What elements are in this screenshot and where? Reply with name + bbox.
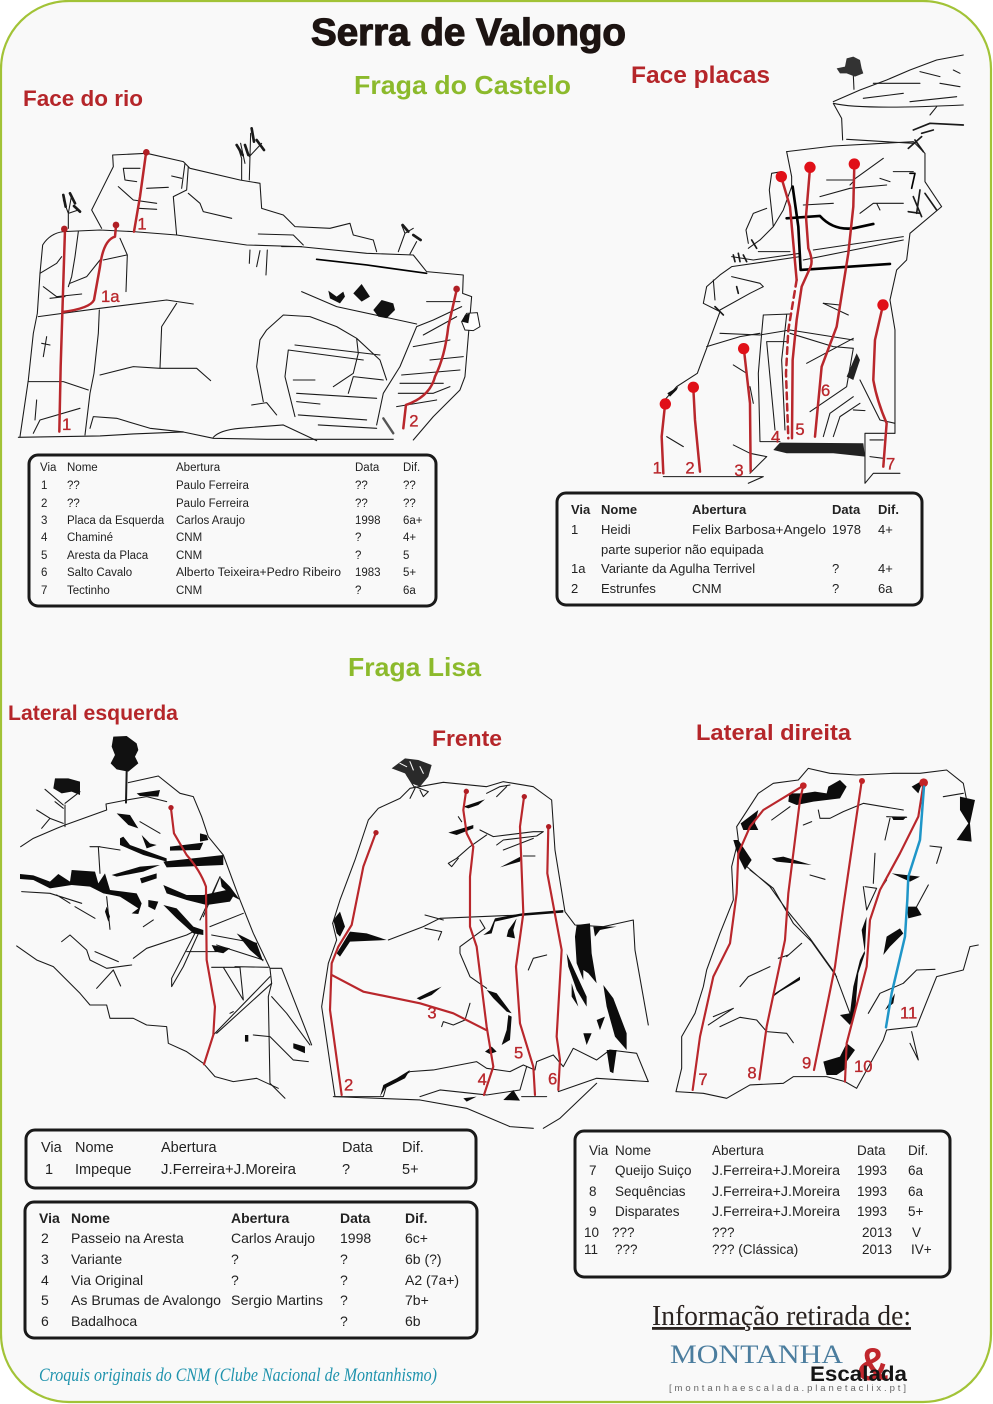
table: Lateral direita routes: IV+ <box>911 1242 932 1257</box>
table: Face do rio routes: 6a <box>878 581 893 596</box>
table: Lateral direita routes <box>575 1131 950 1277</box>
table: Face placas routes: Abertura <box>176 462 221 474</box>
table: Lateral esquerda route: J.Ferreira+J.Moreira <box>161 1162 297 1178</box>
table: Face placas routes: Tectinho <box>67 585 110 597</box>
diagram: Frente: 6 <box>548 1069 557 1088</box>
table: Lateral esquerda route: Via <box>41 1140 63 1156</box>
table: Face placas routes: Salto Cavalo <box>67 567 132 579</box>
table: Frente routes: Sergio Martins <box>231 1292 323 1308</box>
table: Frente routes: ? <box>231 1272 239 1288</box>
table: Face placas routes: ?? <box>67 498 80 510</box>
table: Face placas routes: Alberto Teixeira+Pedro Ribeiro <box>176 567 341 579</box>
table: Face do rio routes: Variante da Agulha Terrivel <box>601 561 755 576</box>
table: Frente routes: Badalhoca <box>71 1313 137 1329</box>
table: Face placas routes: 6a+ <box>403 515 423 527</box>
table: Lateral direita routes: Nome <box>615 1143 651 1158</box>
table: Face do rio routes: ? <box>832 561 839 576</box>
table: Lateral direita routes: 1993 <box>857 1204 887 1219</box>
table: Lateral esquerda route: Data <box>342 1140 374 1156</box>
logo: Montanha & Escalada: & <box>857 1338 889 1390</box>
table: Lateral direita routes: Abertura <box>712 1143 764 1158</box>
table: Face placas routes: Paulo Ferreira <box>176 480 249 492</box>
table: Face do rio routes: Data <box>832 502 861 517</box>
table: Lateral direita routes: J.Ferreira+J.Moreira <box>712 1184 841 1199</box>
table: Frente routes: 1998 <box>340 1230 371 1246</box>
heading: Lateral direita: Lateral direita <box>696 720 852 745</box>
table: Lateral direita routes: Queijo Suiço <box>615 1163 692 1178</box>
table: Lateral direita routes: Sequências <box>615 1184 686 1199</box>
diagram: Frente: 5 <box>514 1043 523 1062</box>
table: Face do rio routes: Abertura <box>692 502 747 517</box>
table: Face placas routes: ? <box>355 532 361 544</box>
table: Frente routes: Via Original <box>71 1272 143 1288</box>
table: Frente routes: Via <box>39 1210 60 1226</box>
table: Face placas routes: ?? <box>403 498 416 510</box>
table: Frente routes: ? <box>340 1313 348 1329</box>
diagram: Lateral direita: 11 <box>900 1004 917 1023</box>
table: Face placas routes: CNM <box>176 532 202 544</box>
diagram: Face placas: 3 <box>734 461 744 480</box>
table: Lateral esquerda route: ? <box>342 1162 350 1178</box>
table: Face placas routes: 6a <box>403 585 416 597</box>
diagram: Face placas: 1 <box>653 458 662 477</box>
heading: Fraga do Castelo: Fraga do Castelo <box>354 70 571 100</box>
diagram: Face do rio: 1 <box>62 415 71 434</box>
diagram: Frente: 4 <box>478 1070 487 1089</box>
logo: Montanha & Escalada: MONTANHA <box>670 1340 843 1369</box>
table: Frente routes: 6b (?) <box>405 1251 442 1267</box>
table: Frente routes: ? <box>340 1251 348 1267</box>
table: Lateral esquerda route: Nome <box>75 1140 114 1156</box>
table: Frente routes: 3 <box>41 1251 49 1267</box>
table: Lateral esquerda route: 5+ <box>402 1162 419 1178</box>
table: Frente routes: 4 <box>41 1272 49 1288</box>
heading: Face placas: Face placas <box>631 62 770 89</box>
table: Face placas routes: Placa da Esquerda <box>67 515 165 527</box>
table: Lateral direita routes: ??? <box>615 1242 638 1257</box>
diagram: Lateral direita: 9 <box>802 1053 811 1072</box>
heading: Lateral esquerda: Lateral esquerda <box>8 702 178 725</box>
diagram: Lateral direita: 10 <box>854 1057 873 1076</box>
table: Face placas routes: Chaminé <box>67 532 113 544</box>
table: Lateral direita routes: 6a <box>908 1163 924 1178</box>
table: Face placas routes: 4+ <box>403 532 416 544</box>
table: Face do rio routes: 1 <box>571 522 578 537</box>
table: Face do rio routes: 2 <box>571 581 578 596</box>
table: Lateral direita routes: Disparates <box>615 1204 680 1219</box>
table: Face placas routes: 2 <box>41 498 47 510</box>
table: Face do rio routes: 1a <box>571 561 586 576</box>
table: Face do rio routes: Felix Barbosa+Angelo <box>692 522 826 537</box>
table: Lateral direita routes: J.Ferreira+J.Moreira <box>712 1204 841 1219</box>
table: Face do rio routes: 4+ <box>878 522 893 537</box>
table: Lateral esquerda route: 1 <box>45 1162 53 1178</box>
table: Frente routes: 6b <box>405 1313 421 1329</box>
table: Lateral direita routes: J.Ferreira+J.Moreira <box>712 1163 841 1178</box>
diagram: Face do rio: 1a <box>101 287 120 306</box>
table: Face placas routes: Paulo Ferreira <box>176 498 249 510</box>
table: Lateral esquerda route <box>26 1130 476 1188</box>
table: Face placas routes: Dif. <box>403 462 420 474</box>
diagram: Face placas <box>653 55 963 483</box>
table: Face do rio routes: parte superior não equipada <box>601 542 764 557</box>
diagram: Lateral direita <box>676 768 978 1098</box>
table: Lateral direita routes: ??? <box>612 1225 635 1240</box>
table: Face placas routes: ?? <box>67 480 80 492</box>
diagram: Face placas: 4 <box>771 428 780 447</box>
table: Frente routes: Variante <box>71 1251 122 1267</box>
table: Face do rio routes: 1978 <box>832 522 861 537</box>
table: Lateral direita routes: 9 <box>589 1204 597 1219</box>
table: Face placas routes: ? <box>355 585 361 597</box>
diagram: Face placas: 2 <box>685 458 695 477</box>
table: Face placas routes: CNM <box>176 585 202 597</box>
diagram: Face do rio: 1 <box>137 214 147 233</box>
table: Lateral direita routes: V <box>912 1225 921 1240</box>
table: Frente routes: Nome <box>71 1210 110 1226</box>
table: Face do rio routes: Estrunfes <box>601 581 656 596</box>
table: Frente routes: Carlos Araujo <box>231 1230 315 1246</box>
table: Face do rio routes <box>557 493 922 605</box>
table: Lateral direita routes: 1993 <box>857 1163 887 1178</box>
table: Face do rio routes: 4+ <box>878 561 893 576</box>
table: Lateral esquerda route: Impeque <box>75 1162 131 1178</box>
table: Face do rio routes: Dif. <box>878 502 899 517</box>
table: Face placas routes: Via <box>40 462 57 474</box>
table: Frente routes: Dif. <box>405 1210 428 1226</box>
table: Face placas routes: ? <box>355 550 361 562</box>
table: Face placas routes: 6 <box>41 567 47 579</box>
table: Frente routes: As Brumas de Avalongo <box>71 1292 221 1308</box>
heading: Frente: Frente <box>432 726 502 751</box>
table: Face placas routes: 1 <box>41 480 47 492</box>
icon: tree top of block <box>237 128 264 180</box>
table: Lateral direita routes: 2013 <box>862 1242 892 1257</box>
table: Face placas routes: 5 <box>403 550 409 562</box>
table: Frente routes: 6c+ <box>405 1230 428 1246</box>
icon: small tree right <box>398 225 421 254</box>
heading: Face do rio: Face do rio <box>23 86 143 111</box>
table: Face placas routes: 4 <box>41 532 48 544</box>
table: Face do rio routes: ? <box>832 581 839 596</box>
credit: original sketches: Croquis originais do CNM (Clube Nacional de Montanhismo) <box>39 1365 437 1386</box>
table: Lateral direita routes: Data <box>857 1143 886 1158</box>
table: Frente routes: ? <box>231 1251 239 1267</box>
table: Frente routes: Passeio na Aresta <box>71 1230 184 1246</box>
table: Lateral direita routes: 1993 <box>857 1184 887 1199</box>
table: Lateral direita routes: Dif. <box>908 1143 928 1158</box>
table: Lateral direita routes: Via <box>589 1143 609 1158</box>
table: Face placas routes: Nome <box>67 462 98 474</box>
table: Lateral direita routes: 11 <box>584 1242 598 1257</box>
table: Face placas routes: 3 <box>41 515 47 527</box>
source heading: Informação retirada de: <box>652 1301 911 1332</box>
diagram: Lateral direita: 8 <box>747 1063 757 1082</box>
logo: Montanha & Escalada <box>669 1338 907 1394</box>
table: Face placas routes: Carlos Araujo <box>176 515 245 527</box>
heading: Fraga Lisa: Fraga Lisa <box>348 652 482 682</box>
table: Face do rio routes: Nome <box>601 502 637 517</box>
diagram: Face placas: 5 <box>795 420 805 439</box>
diagram: Frente: 3 <box>427 1003 437 1022</box>
table: Frente routes <box>25 1202 477 1338</box>
table: Face placas routes: 5+ <box>403 567 416 579</box>
diagram: Face placas: 6 <box>821 381 830 400</box>
table: Frente routes: A2 (7a+) <box>405 1272 459 1288</box>
table: Lateral direita routes: ??? <box>712 1225 735 1240</box>
table: Lateral esquerda route: Abertura <box>161 1140 218 1156</box>
diagram: Frente: 2 <box>344 1076 353 1095</box>
icon: small tree left <box>63 193 80 228</box>
table: Face placas routes: 1998 <box>355 515 381 527</box>
table: Face placas routes: ?? <box>355 480 368 492</box>
table: Frente routes: Abertura <box>231 1210 290 1226</box>
table: Face placas routes: Data <box>355 462 380 474</box>
diagram: Frente <box>322 758 648 1128</box>
logo: Montanha & Escalada: [montanhaescalada.planetaclix.pt] <box>669 1383 906 1394</box>
table: Frente routes: 7b+ <box>405 1292 429 1308</box>
table: Face do rio routes: Via <box>571 502 591 517</box>
table: Lateral esquerda route: Dif. <box>402 1140 424 1156</box>
table: Face placas routes: 1983 <box>355 567 381 579</box>
title: Serra de Valongo <box>311 12 626 54</box>
table: Lateral direita routes: ??? (Clássica) <box>712 1242 798 1257</box>
table: Lateral direita routes: 2013 <box>862 1225 892 1240</box>
table: Lateral direita routes: 6a <box>908 1184 924 1199</box>
diagram: Lateral esquerda <box>17 736 312 1098</box>
diagram: Face placas: 7 <box>886 454 895 473</box>
table: Lateral direita routes: 8 <box>589 1184 597 1199</box>
table: Frente routes: 6 <box>41 1313 49 1329</box>
table: Face placas routes: ?? <box>355 498 368 510</box>
diagram: Lateral direita: 7 <box>698 1070 708 1089</box>
table: Frente routes: ? <box>340 1292 348 1308</box>
logo: Montanha & Escalada: Escalada <box>810 1363 907 1386</box>
diagram: Face do rio <box>18 128 480 441</box>
table: Face do rio routes: CNM <box>692 581 722 596</box>
table: Frente routes: ? <box>340 1272 348 1288</box>
table: Frente routes: Data <box>340 1210 371 1226</box>
diagram: Face do rio: 2 <box>409 412 419 431</box>
table: Face placas routes: 7 <box>41 585 47 597</box>
table: Face placas routes: 5 <box>41 550 47 562</box>
table: Face do rio routes: Heidi <box>601 522 631 537</box>
table: Face placas routes: CNM <box>176 550 202 562</box>
table: Face placas routes: ?? <box>403 480 416 492</box>
table: Face placas routes: Aresta da Placa <box>67 550 149 562</box>
table: Frente routes: 5 <box>41 1292 49 1308</box>
table: Lateral direita routes: 7 <box>589 1163 597 1178</box>
table: Face placas routes <box>29 455 436 606</box>
icon: tree on top rock <box>837 57 863 89</box>
table: Lateral direita routes: 5+ <box>908 1204 924 1219</box>
table: Lateral direita routes: 10 <box>584 1225 599 1240</box>
table: Frente routes: 2 <box>41 1230 49 1246</box>
